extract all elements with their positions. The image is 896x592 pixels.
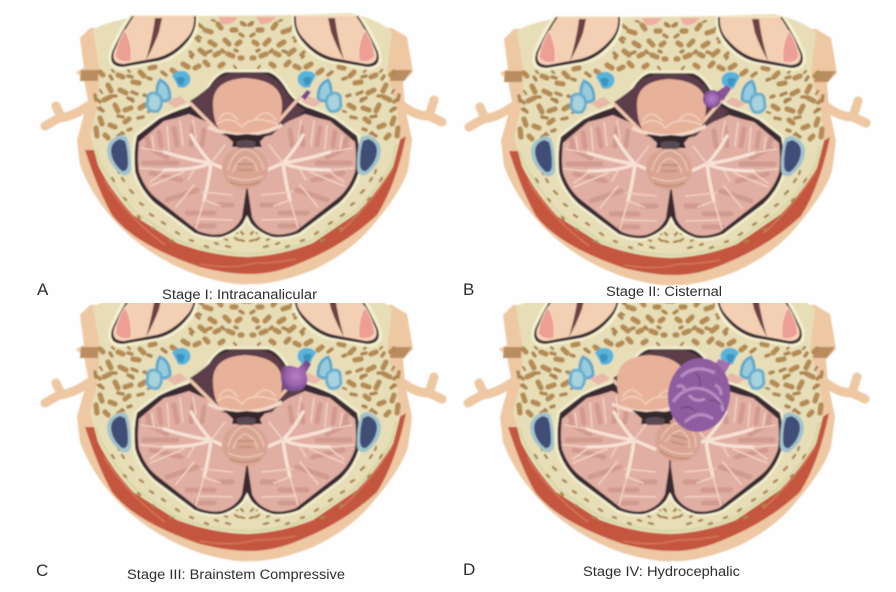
- tumor: brainstem compressive: [281, 360, 311, 391]
- head cross-section A: [45, 13, 442, 284]
- panel C: stage III: [45, 290, 442, 561]
- brainstem A: [208, 78, 282, 135]
- label A: A: [37, 280, 49, 299]
- head cross-section C: [45, 290, 442, 561]
- label D: D: [463, 560, 475, 579]
- vermis A: [222, 147, 268, 189]
- caption C: Stage III: Brainstem Compressive: [127, 567, 345, 582]
- brainstem B: [632, 79, 706, 136]
- panel A: stage I: [45, 13, 442, 284]
- displaced fourth ventricle D: [632, 410, 677, 425]
- head cross-section B: [469, 14, 866, 285]
- tumor: intracanalicular: [301, 90, 311, 100]
- displaced vermis D: [656, 419, 702, 462]
- caption D: Stage IV: Hydrocephalic: [583, 564, 740, 579]
- fourth ventricle B: [647, 134, 692, 149]
- caption A: Stage I: Intracanalicular: [162, 287, 318, 302]
- head cross-section D: [468, 290, 865, 561]
- caption B: Stage II: Cisternal: [606, 284, 722, 299]
- vermis B: [646, 148, 692, 190]
- tumor: hydrocephalic: [667, 357, 732, 433]
- brainstem C: [208, 355, 282, 412]
- panel D: stage IV: [468, 290, 865, 561]
- vermis C: [222, 424, 268, 466]
- panel B: stage II: [469, 14, 866, 285]
- fourth ventricle C: [223, 410, 268, 425]
- tumor: cisternal: [703, 85, 731, 108]
- displaced brainstem D: [612, 355, 686, 412]
- label B: B: [463, 280, 474, 299]
- label C: C: [36, 561, 48, 580]
- fourth ventricle A: [223, 133, 268, 148]
